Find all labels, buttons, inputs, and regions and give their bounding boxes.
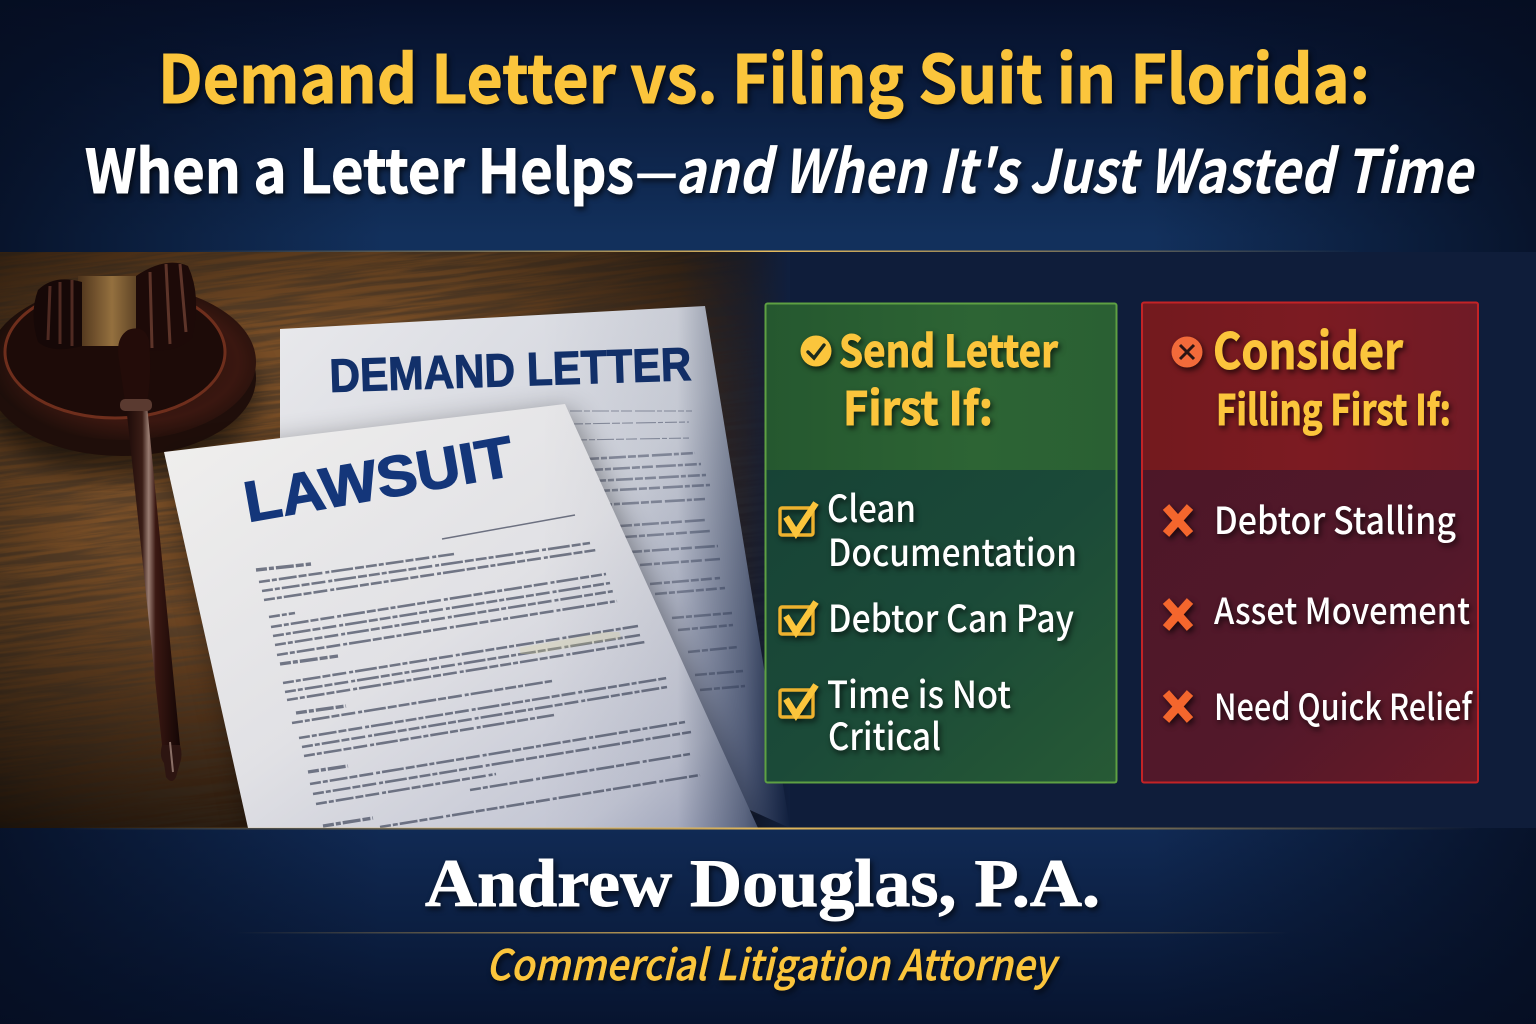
title line 2 upright: When a Letter Helps — [85, 124, 634, 211]
gavel sounding block — [0, 284, 256, 475]
panel red header background — [1142, 303, 1478, 470]
item text — [827, 665, 1011, 761]
panel green border — [766, 304, 1116, 782]
heading line 2: First If: — [843, 373, 993, 439]
fade of photo into navy — [632, 252, 790, 828]
item: debtor can pay — [780, 589, 1074, 643]
gold divider top — [180, 250, 1360, 252]
icon: x mark — [1166, 693, 1190, 720]
item text line 2: Documentation — [828, 523, 1077, 577]
heading: send letter first if — [839, 316, 1059, 439]
item: clean documentation — [780, 479, 1077, 577]
heading: consider filling first if — [1213, 312, 1451, 438]
demand letter body lines — [570, 411, 745, 690]
title em dash: — — [635, 124, 678, 211]
heading line 1: Consider — [1213, 312, 1403, 384]
panel green header background — [766, 304, 1117, 470]
lawsuit rule — [442, 515, 575, 539]
item text: Debtor Can Pay — [828, 589, 1074, 643]
icon: checkbox — [780, 685, 816, 717]
heading line 1: Send Letter — [839, 316, 1059, 380]
panel red body background — [1142, 470, 1478, 783]
icon: x mark — [1166, 601, 1190, 628]
item: need quick relief — [1166, 679, 1473, 731]
icon: orange x circle — [1172, 336, 1202, 368]
heading line 2: Filling First If: — [1216, 377, 1451, 438]
item text line 1: Clean — [827, 479, 916, 533]
footer divider — [235, 932, 1290, 934]
highlight smudge — [520, 634, 620, 652]
item text line 2: Critical — [828, 707, 941, 761]
item text line 1: Time is Not — [827, 665, 1011, 719]
title line 1: Demand Letter vs. Filing Suit in Florida: — [158, 27, 1370, 123]
item text — [827, 479, 1077, 577]
icon: gold check circle — [800, 336, 832, 366]
panel red border — [1142, 302, 1478, 782]
lawsuit body lines — [256, 543, 700, 827]
panel green body background — [766, 470, 1117, 783]
firm name: Andrew Douglas, P.A. — [425, 845, 1100, 921]
item: asset movement — [1166, 583, 1470, 635]
icon: checkbox — [780, 602, 816, 634]
icon: checkbox — [780, 503, 816, 535]
gavel head — [34, 263, 196, 350]
icon: x mark — [1166, 507, 1190, 534]
photo band: dark right background — [0, 252, 1536, 828]
lawsuit heading: LAWSUIT — [239, 425, 518, 535]
item text: Need Quick Relief — [1214, 679, 1473, 731]
panel: send letter first — [766, 304, 1117, 783]
gavel handle — [118, 328, 182, 781]
title — [85, 27, 1476, 211]
panel: consider filing first — [1142, 302, 1478, 783]
item text: Debtor Stalling — [1214, 491, 1456, 545]
item text: Asset Movement — [1214, 583, 1470, 635]
gold divider bottom — [60, 828, 1480, 830]
wood desk — [0, 252, 776, 828]
photo: gavel and documents on desk — [0, 252, 786, 828]
demand letter heading: DEMAND LETTER — [329, 337, 692, 402]
document: demand letter — [280, 306, 790, 828]
item: debtor stalling — [1166, 491, 1456, 545]
document: lawsuit — [164, 404, 763, 834]
item: time is not critical — [780, 665, 1011, 761]
subtitle: commercial litigation attorney: Commercial Litigation Attorney — [486, 932, 1061, 993]
